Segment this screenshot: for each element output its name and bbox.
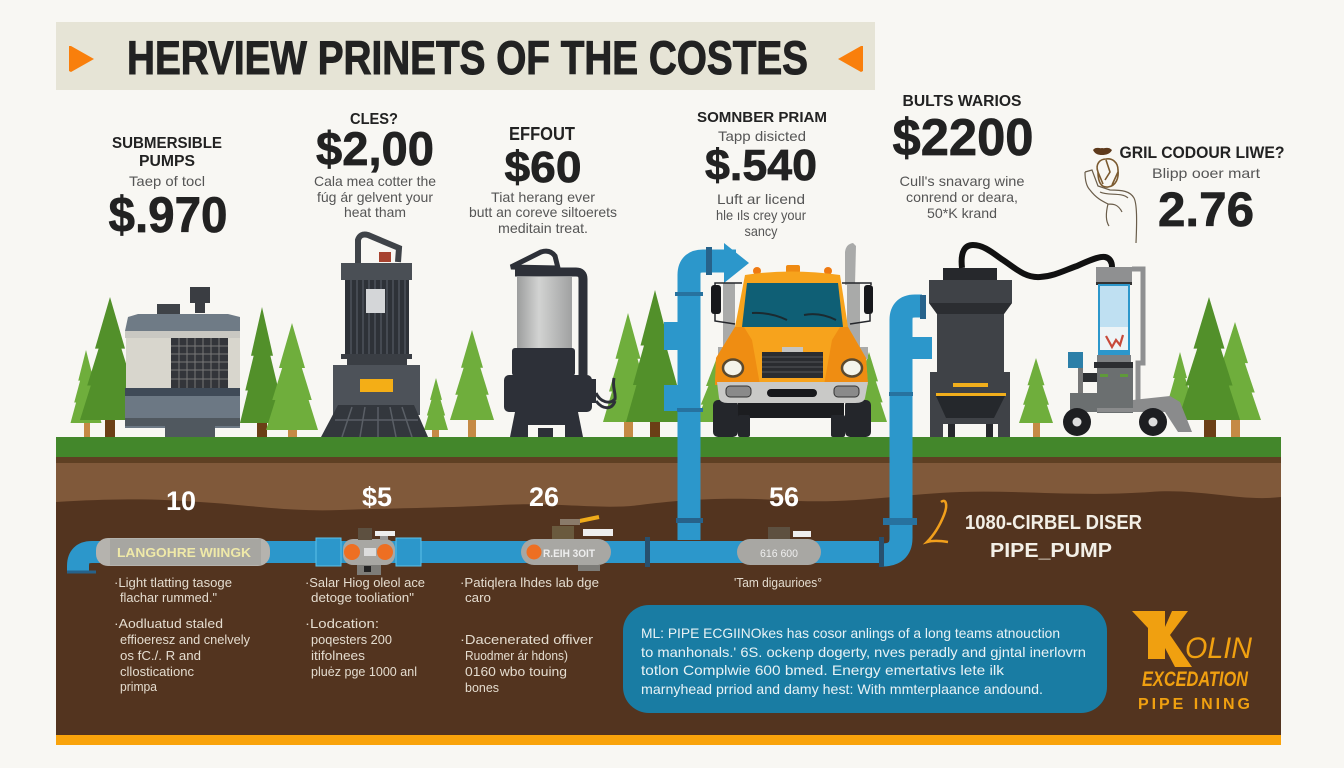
column: bults warios price <box>892 93 1034 221</box>
column: bults warios price: conrend or deara, <box>906 189 1018 205</box>
bullet list 3 <box>460 575 599 695</box>
title banner <box>56 22 875 90</box>
bullet list 2: pluėz pge 1000 anl <box>311 664 417 679</box>
bullet list 3: bones <box>465 680 499 695</box>
bullet list 3: Ruodmer ár hdons) <box>465 648 568 663</box>
column: truck price: $.540 <box>705 141 817 190</box>
column: truck price: SOMNBER PRIAM <box>697 109 827 126</box>
column: gril codour live: 2.76 <box>1158 184 1254 237</box>
truck <box>711 243 873 437</box>
column: truck price: sancy <box>744 223 778 239</box>
column: second price: CLES? <box>350 111 398 128</box>
capsule: Langohre Wiingk <box>96 538 270 566</box>
bullet list 1 <box>114 575 250 694</box>
horizontal pipeline <box>67 517 917 575</box>
bullet list 2: ·Lodcation: <box>305 616 379 631</box>
column: submersible pumps: PUMPS <box>139 153 195 170</box>
pump 2: tall ribbed pump <box>321 235 428 437</box>
dark tank <box>929 268 1012 437</box>
column: bults warios price: BULTS WARIOS <box>902 93 1022 110</box>
column: submersible pumps: SUBMERSIBLE <box>112 135 222 152</box>
numeral and pipe pump label <box>927 501 1143 562</box>
bullet list 2: detoge tooliation" <box>311 590 414 605</box>
column: submersible pumps: $.970 <box>108 187 228 243</box>
column: second price <box>314 111 436 220</box>
bullet list 3: caro <box>465 590 491 605</box>
soil section numbers: 10 <box>166 486 196 516</box>
column: submersible pumps <box>108 135 228 243</box>
blue summary box: to manhonals.' 6S. ockenp dogerty, nves peradly and gjntal inerlovrn <box>641 644 1086 660</box>
icon: hand holding seed <box>1085 148 1137 243</box>
right vertical pipe <box>889 295 932 522</box>
pump 3: silver cylinder pump <box>504 251 615 437</box>
column: effout price: $60 <box>504 143 582 192</box>
column: truck price: Luft ar licend <box>717 191 805 207</box>
pump 1: grey generator unit <box>125 287 240 437</box>
soil section numbers: 26 <box>529 482 559 512</box>
bullet list 4: 'Tam digaurioes° <box>734 575 822 590</box>
column: second price: Cala mea cotter the <box>314 173 436 189</box>
bullet list 3: ·Dacenerated offiver <box>460 632 594 647</box>
bullet list 1: flachar rummed." <box>120 590 217 605</box>
soil section numbers: 56 <box>769 482 799 512</box>
column: truck price <box>697 109 827 239</box>
bullet list 2: itifolnees <box>311 648 366 663</box>
trees <box>70 290 1261 437</box>
column: effout price: EFFOUT <box>509 124 575 144</box>
column: effout price: Tiat herang ever <box>491 189 595 205</box>
capsule: Langohre Wiingk: LANGOHRE WIINGK <box>117 545 252 560</box>
black hose <box>962 245 1112 277</box>
bullet list 3: 0160 wbo touing <box>465 664 567 679</box>
numeral and pipe pump label: 1080-CIRBEL DISER <box>965 512 1143 534</box>
column: bults warios price: $2200 <box>892 109 1034 167</box>
left vertical pipe with arrow <box>664 243 749 540</box>
bullet list 1: os fC./. R and <box>120 648 201 663</box>
column: effout price: meditain treat. <box>498 220 588 236</box>
bullet list 1: cllosticationc <box>120 664 194 679</box>
column: bults warios price: 50*K krand <box>927 205 997 221</box>
blue summary box: marnyhead prriod and damy hest: With mmterplaance andound. <box>641 681 1043 697</box>
bullet list 1: ·Aodluatud staled <box>114 616 223 631</box>
valve 3 <box>521 517 613 571</box>
logo: Kolin Excavation <box>1132 611 1252 713</box>
valve 4: 616 600 <box>760 548 798 560</box>
blue summary box: ML: PIPE ECGIINOkes has cosor anlings of a long teams atnouction <box>641 625 1060 641</box>
column: second price: fúg ár gelvent your <box>317 189 433 205</box>
blue summary box: totlon Complwie 600 bmed. Energy emertativs lete ilk <box>641 662 1005 678</box>
bullet list 2 <box>305 575 425 679</box>
icon: right orange arrow <box>838 46 863 72</box>
column: second price: heat tham <box>344 204 406 220</box>
valve 3: R.EIH 3OIT <box>543 548 595 560</box>
column: gril codour live <box>1120 143 1284 237</box>
bullet list 1: ·Light tlatting tasoge <box>114 575 232 590</box>
title text: HERVIEW PRINETS OF THE COSTES <box>127 31 808 84</box>
logo: Kolin Excavation: OLIN <box>1185 632 1252 665</box>
logo: Kolin Excavation: EXCEDATION <box>1142 668 1249 691</box>
bullet list 1: primpa <box>120 679 158 694</box>
column: truck price: Tapp disicted <box>718 128 806 144</box>
bullet list 2: ·Salar Hiog oleol ace <box>305 575 425 590</box>
soil section numbers: $5 <box>362 482 392 512</box>
bullet list 1: effioeresz and cnelvely <box>120 632 250 647</box>
valve 4 <box>737 527 821 565</box>
column: gril codour live: Blipp ooer mart <box>1152 165 1260 181</box>
icon: left orange arrow <box>69 46 94 72</box>
column: submersible pumps: Taep of tocl <box>129 173 205 189</box>
column: effout price <box>469 124 617 236</box>
filter cart <box>1063 267 1192 436</box>
bullet list 2: poqesters 200 <box>311 632 392 647</box>
blue summary box <box>623 605 1107 713</box>
column: effout price: butt an coreve siltoerets <box>469 204 617 220</box>
column: gril codour live: GRIL CODOUR LIWE? <box>1120 143 1284 162</box>
ground and soil <box>56 437 1281 745</box>
valve 2 <box>316 528 421 575</box>
logo: Kolin Excavation: PIPE INING <box>1138 696 1250 713</box>
soil section numbers <box>166 482 799 516</box>
numeral and pipe pump label: PIPE_PUMP <box>990 540 1112 562</box>
column: truck price: hle ıls crey your <box>716 207 806 223</box>
column: second price: $2,00 <box>316 122 434 175</box>
column: bults warios price: Cull's snavarg wine <box>900 173 1025 189</box>
bullet list 3: ·Patiqlera lhdes lab dge <box>460 575 599 590</box>
